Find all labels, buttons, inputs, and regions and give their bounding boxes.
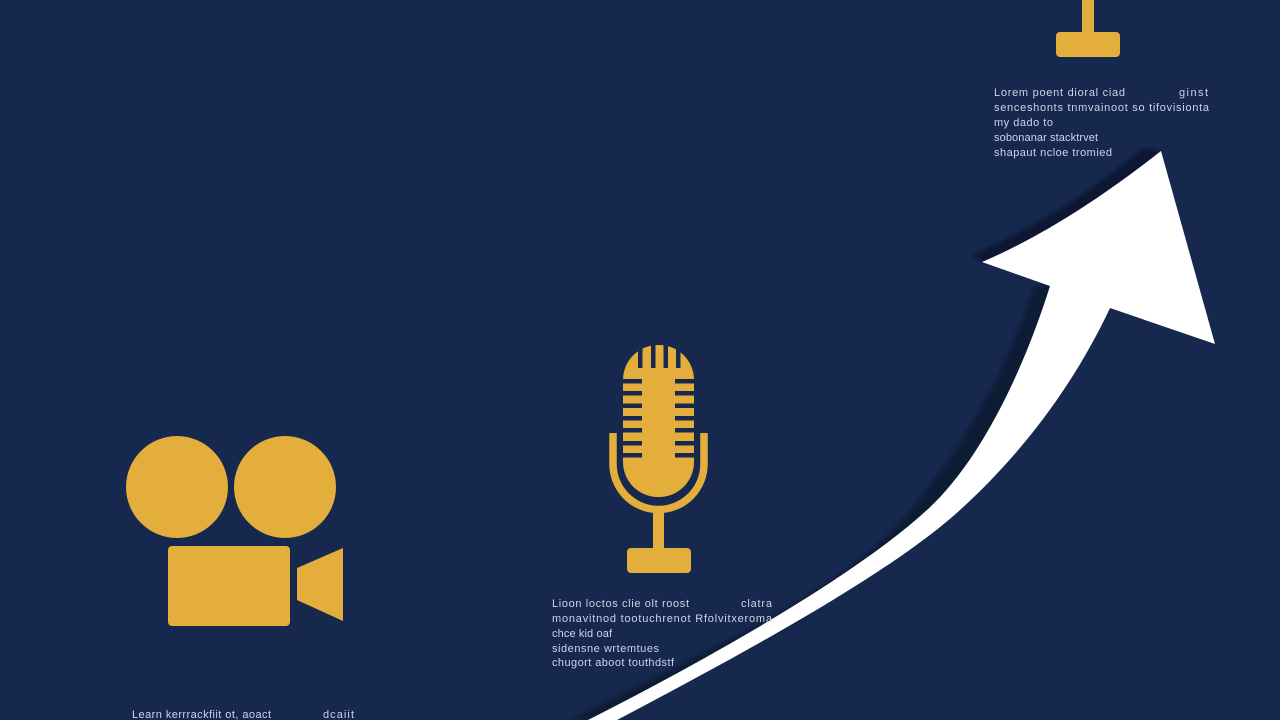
icon: film camera <box>126 436 343 626</box>
text block: top right: my dado to <box>994 117 1053 129</box>
text block: middle: monavitnod tootuchrenot Rfolvitxeroma <box>552 613 773 625</box>
text block: top right: Lorem poent dioral ciad <box>994 87 1125 99</box>
text block: middle: clatra <box>741 598 773 610</box>
arrow head shadow <box>973 148 1161 262</box>
icon: microphone <box>613 343 704 573</box>
icon: microphone base, cropped at top <box>1056 0 1120 57</box>
text block: middle: chugort aboot touthdstf <box>552 657 675 669</box>
growth arrow <box>570 148 1215 720</box>
text block: top right: senceshonts tnmvainoot so tifovisionta <box>994 102 1210 114</box>
text block: top right: shapaut ncloe tromied <box>994 147 1112 159</box>
text block: middle: chce kid oaf <box>552 628 613 640</box>
text block: middle: sidensne wrtemtues <box>552 643 660 655</box>
text block: top right: ginst <box>1179 87 1208 99</box>
arrow shaft shadow <box>570 284 1052 720</box>
text block: bottom left <box>132 709 354 720</box>
arrow body <box>588 151 1215 720</box>
text block: middle: Lioon loctos clie olt roost <box>552 598 689 610</box>
text block: top right <box>994 87 1210 159</box>
text block: top right: sobonanar stacktrvet <box>994 132 1098 144</box>
text block: middle <box>552 598 773 669</box>
